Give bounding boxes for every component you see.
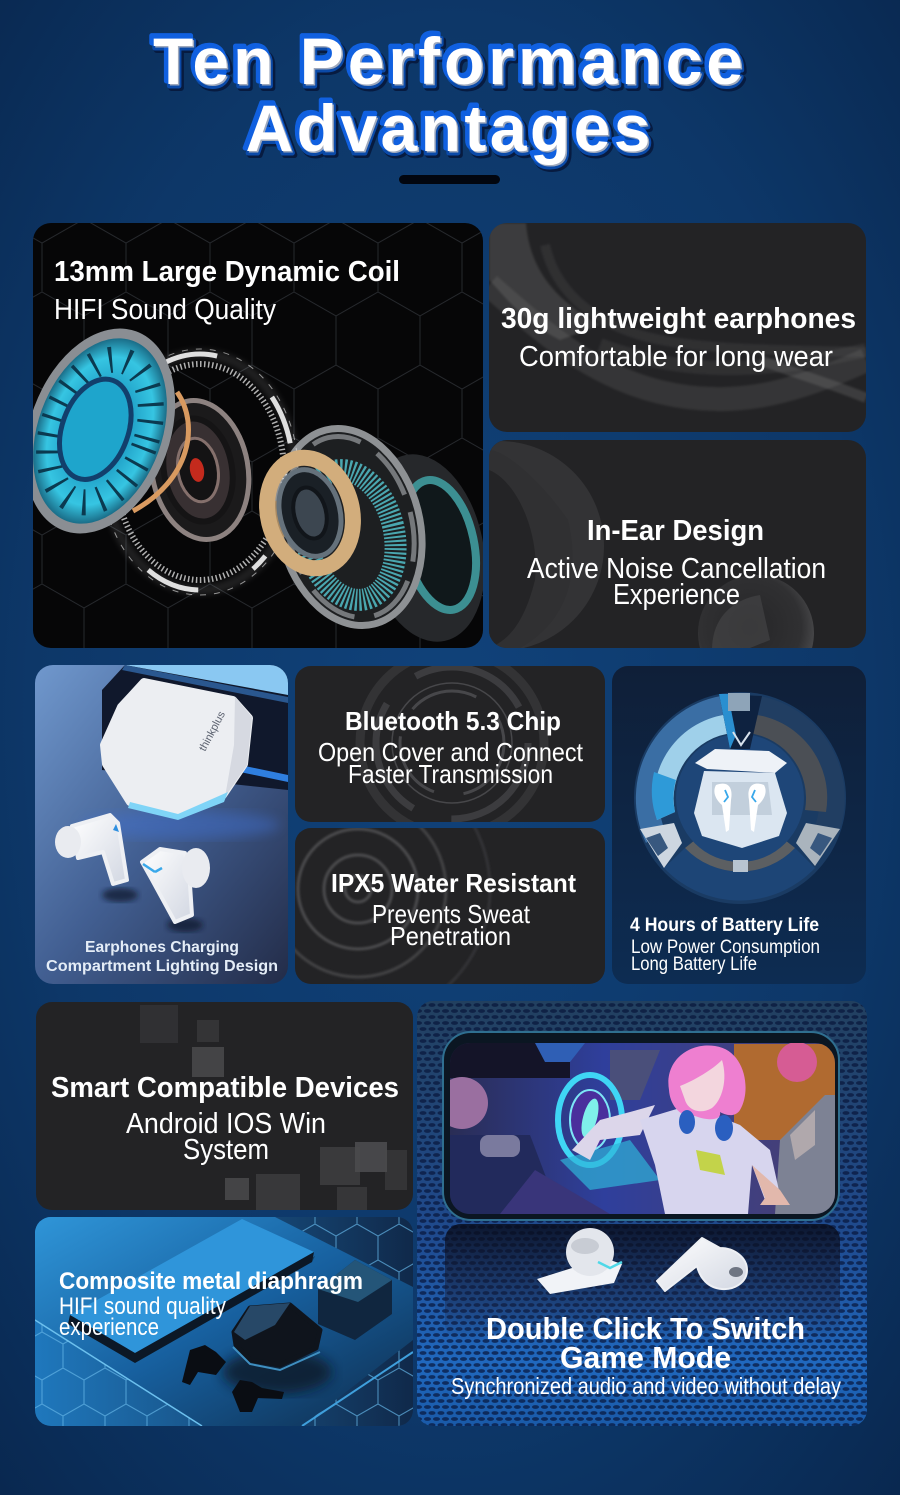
panel: charging compartment	[35, 665, 288, 984]
text block	[319, 742, 583, 784]
title: Advantages	[244, 88, 648, 162]
heading: Bluetooth 5.3 Chip	[345, 706, 561, 736]
text block: Prevents Sweat	[372, 899, 531, 929]
title: Advantages	[247, 92, 652, 166]
title: Advantages	[246, 93, 652, 167]
title: Ten Performance	[151, 21, 741, 95]
caption: Compartment Lighting Design	[46, 958, 278, 975]
heading: Composite metal diaphragm	[59, 1268, 363, 1295]
icon: black earbuds	[182, 1345, 284, 1412]
panel: bluetooth	[295, 666, 605, 822]
text block	[631, 937, 820, 975]
text block	[527, 553, 826, 611]
panel: game mode	[417, 1001, 867, 1426]
title underline	[399, 175, 500, 184]
heading: 4 Hours of Battery Life	[630, 915, 819, 936]
title: Advantages	[248, 95, 654, 169]
panel: lightweight earphones	[489, 223, 866, 432]
text block: Android IOS Win	[126, 1108, 326, 1140]
text block: System	[183, 1134, 269, 1166]
panel: 13mm dynamic coil	[33, 223, 483, 648]
panel: composite metal diaphragm	[35, 1217, 413, 1426]
heading: Double Click To Switch	[486, 1311, 805, 1346]
icon: charging case: thinkplus	[197, 709, 228, 753]
icon: earbuds case	[222, 1303, 332, 1394]
phone reflection	[445, 1224, 840, 1340]
icon: charging case	[104, 682, 252, 820]
title: Ten Performance	[156, 28, 746, 102]
icon: exploded speaker driver	[33, 328, 483, 642]
text block	[126, 1108, 326, 1166]
heading: IPX5 Water Resistant	[331, 868, 576, 898]
text block: experience	[59, 1314, 159, 1341]
icon: metal cube	[318, 1260, 392, 1340]
text block	[374, 904, 530, 946]
text block: Comfortable for long wear	[519, 341, 833, 373]
panel: in-ear design	[489, 440, 866, 648]
title: Ten Performance	[154, 26, 744, 100]
heading: 30g lightweight earphones	[501, 303, 856, 335]
text block: Active Noise Cancellation	[527, 553, 826, 585]
text block	[59, 1293, 226, 1341]
text block: Experience	[613, 579, 740, 611]
heading: Smart Compatible Devices	[51, 1072, 399, 1104]
panel: water resistant	[295, 828, 605, 984]
heading: In-Ear Design	[587, 515, 764, 547]
icon: white earbuds	[537, 1228, 747, 1294]
panel: smart compatible devices	[36, 1002, 413, 1210]
heading	[488, 1317, 804, 1368]
text block: HIFI Sound Quality	[54, 294, 276, 326]
heading: Game Mode	[560, 1340, 731, 1375]
text block: Open Cover and Connect	[318, 737, 584, 767]
heading: 13mm Large Dynamic Coil	[54, 256, 400, 288]
text block: Long Battery Life	[631, 954, 757, 975]
text block: HIFI sound quality	[59, 1293, 226, 1320]
caption	[46, 939, 278, 975]
title	[151, 21, 746, 169]
title: Ten Performance	[153, 24, 743, 98]
text block: Low Power Consumption	[631, 937, 820, 958]
icon: circular charging dock	[634, 692, 846, 904]
icon: phone with game scene	[436, 1032, 839, 1220]
text block: Faster Transmission	[348, 759, 553, 789]
text block: Penetration	[390, 921, 511, 951]
icon: smartphone	[68, 1219, 315, 1363]
panel: battery life	[612, 666, 866, 984]
title: Ten Performance	[154, 26, 744, 100]
caption: Earphones Charging	[85, 939, 239, 956]
icon: earbuds	[55, 815, 210, 932]
title: Advantages	[246, 91, 650, 165]
text block: Synchronized audio and video without delay	[451, 1373, 841, 1399]
